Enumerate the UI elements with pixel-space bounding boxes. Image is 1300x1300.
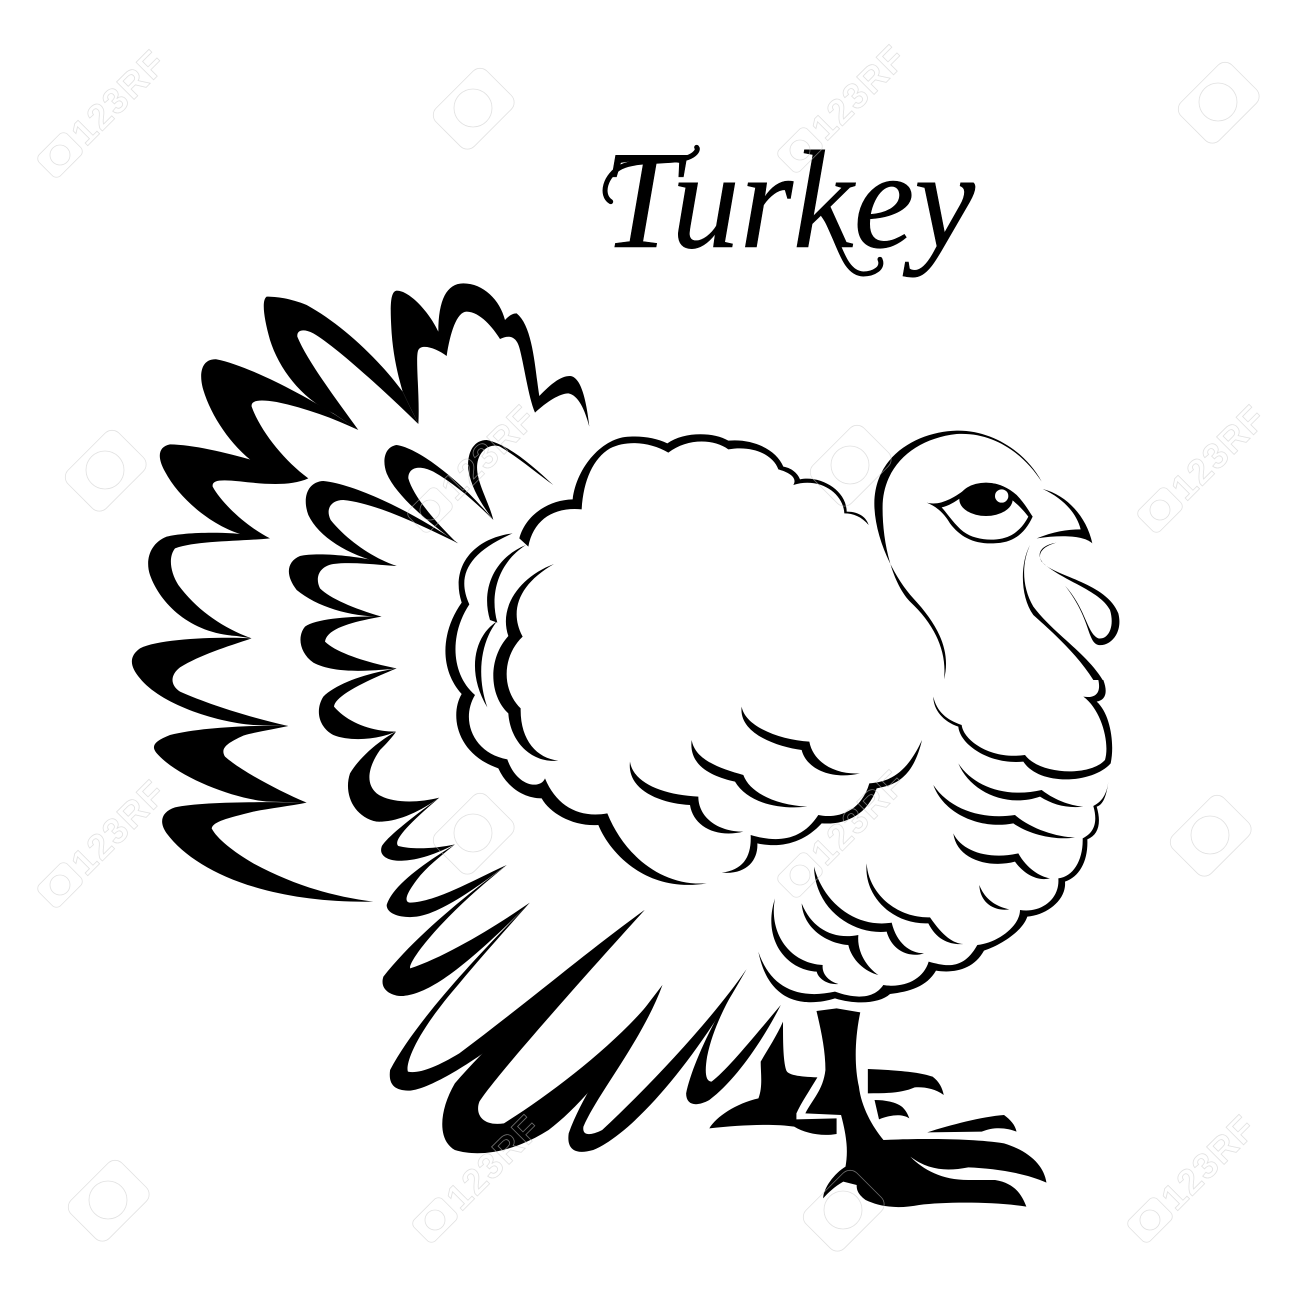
- wattle: [1040, 543, 1119, 645]
- thin inner feather line: [475, 622, 497, 707]
- eye iris: [959, 483, 1013, 516]
- rear leg: [709, 1022, 837, 1135]
- second contour: [487, 545, 526, 623]
- body outer contour: [445, 533, 707, 885]
- belly scallop 1: [866, 863, 963, 944]
- front toe upper: [927, 1115, 1017, 1132]
- watermark: text 2: [772, 38, 913, 179]
- rear toe upper: [868, 1069, 944, 1095]
- watermark: camera 8: [799, 1166, 888, 1255]
- watermark: text 4: 123RF: [1163, 398, 1273, 508]
- wing scallop lower: [630, 762, 743, 834]
- third contour: [493, 564, 558, 761]
- watermark: text 6: 123RF: [803, 763, 913, 873]
- front leg and foot: [805, 1008, 1046, 1207]
- watermark: camera 3: [61, 426, 150, 515]
- chest scallop 4: [979, 885, 1009, 910]
- chest scallop 1: [958, 763, 1083, 807]
- watermark: text 5: [32, 773, 173, 914]
- body top contour: [519, 434, 869, 547]
- watermark: camera 2: [1174, 58, 1263, 147]
- watermark: text 7: 123RF: [438, 1108, 548, 1218]
- chest contour: [933, 680, 1112, 779]
- legs and feet: [709, 1008, 1046, 1207]
- watermark: text 8: 123RF: [1153, 1108, 1263, 1218]
- watermark: text 1: 123RF: [63, 43, 173, 153]
- watermark: text 1: [32, 43, 173, 184]
- watermark: text 8: [1122, 1108, 1263, 1249]
- watermark: camera 5: [429, 789, 518, 878]
- watermark: text 6: [772, 763, 913, 904]
- inner tail feathers, lower: [383, 865, 781, 1153]
- chest and belly scallops: [758, 680, 1112, 1002]
- watermark: camera 1: [429, 64, 518, 153]
- outer tail feathers, lower: [132, 638, 373, 902]
- inner tail feathers, upper: [289, 440, 553, 617]
- belly outer contour: [758, 782, 1108, 1002]
- chest scallop 2: [933, 785, 1075, 838]
- title: Turkey: [603, 123, 976, 278]
- throat line: [1023, 545, 1103, 680]
- chest scallop 3: [953, 833, 1050, 879]
- inner tail feathers, middle: [300, 617, 507, 917]
- eye outline: [927, 483, 1033, 543]
- watermark: text 2: 123RF: [803, 38, 913, 148]
- watermark: camera 4: [806, 421, 895, 510]
- head: [874, 431, 1119, 680]
- belly scallop 2: [814, 867, 924, 955]
- rear toe middle: [875, 1100, 909, 1119]
- watermark: text 3: 123RF: [433, 398, 543, 508]
- tail scallop lines: [445, 434, 922, 885]
- watermark: text 4: [1132, 398, 1273, 539]
- head and neck outline: [874, 431, 1042, 679]
- belly scallop 4: [771, 898, 838, 984]
- watermark: text 3: [402, 398, 543, 539]
- belly scallop 3: [802, 903, 878, 975]
- wing scallop upper: [741, 707, 860, 775]
- wing scallop middle: [691, 740, 807, 807]
- eye highlight: [995, 489, 1008, 503]
- watermark: text 5: 123RF: [63, 773, 173, 883]
- beak: [1037, 489, 1092, 543]
- watermark: text 7: [407, 1108, 548, 1249]
- watermark: camera 6: [1166, 791, 1255, 880]
- watermark: camera 7: [64, 1156, 153, 1245]
- outer tail feathers, upper: [148, 283, 589, 638]
- wing lower right contour: [722, 740, 922, 873]
- title swashes: [605, 147, 881, 274]
